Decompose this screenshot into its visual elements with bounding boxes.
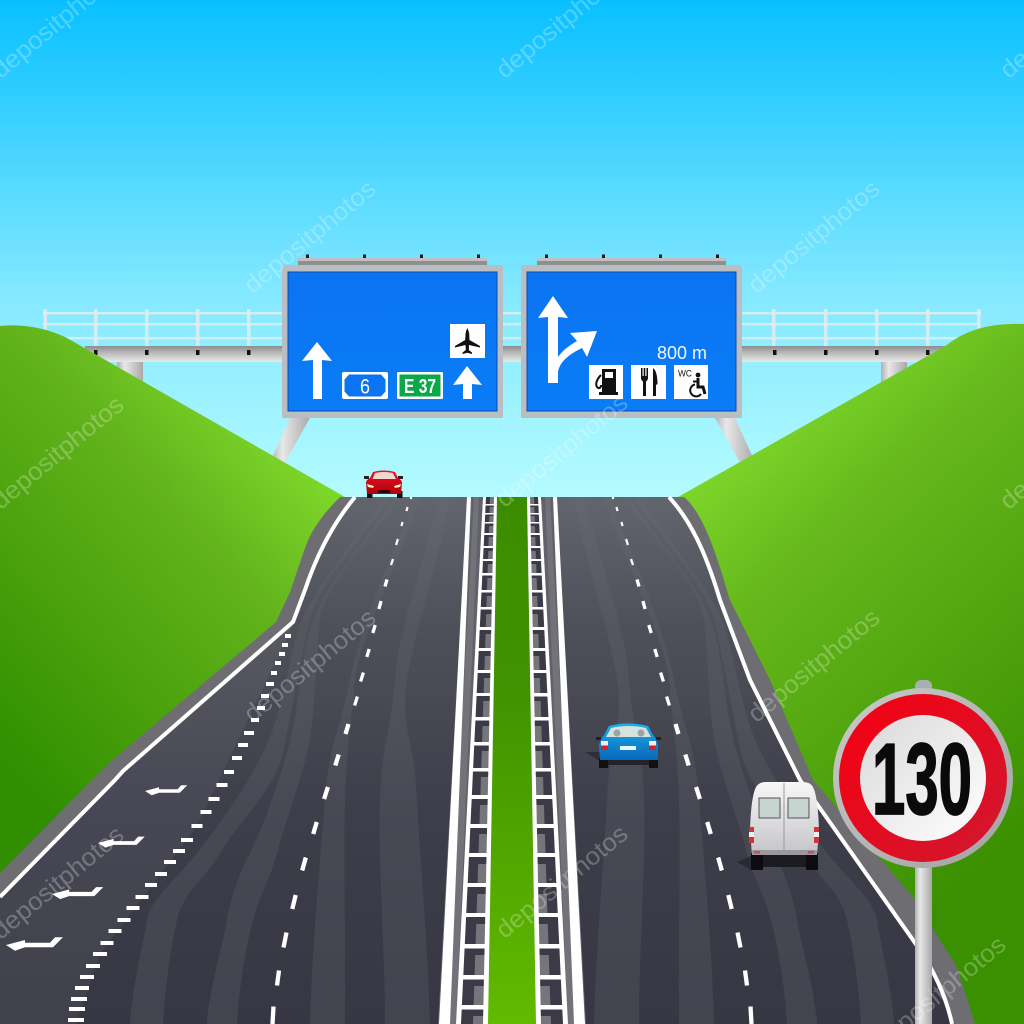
airport arrow xyxy=(453,366,482,399)
white van xyxy=(737,782,819,870)
sign post xyxy=(915,680,932,1024)
gantry railing right xyxy=(742,309,981,346)
right gravel shoulder xyxy=(650,497,975,1024)
right edge line xyxy=(669,497,952,1024)
left carriageway stripes xyxy=(130,688,430,1024)
red ring xyxy=(839,694,1007,862)
E37 sign: E 37 xyxy=(404,376,436,398)
green median strip xyxy=(486,497,538,1024)
stock watermark text: depositphotos xyxy=(491,820,633,944)
asphalt surface xyxy=(0,497,952,1024)
restaurant service icon xyxy=(631,365,666,399)
exit lane arrows xyxy=(6,785,187,951)
gantry railing left xyxy=(43,309,283,346)
stock watermark text: depositphotos xyxy=(743,175,885,299)
stock watermark text: depositphotos xyxy=(743,604,885,728)
left edge line xyxy=(0,497,355,897)
WC accessible service icon xyxy=(674,365,708,399)
right carriageway lane dashes xyxy=(613,497,752,1024)
left guard rail ladder xyxy=(456,497,497,1024)
gantry column right xyxy=(881,362,907,384)
branching arrow xyxy=(538,296,597,383)
gray rim xyxy=(833,688,1013,868)
stock watermark text: depositphotos xyxy=(239,175,381,299)
arrow 1 xyxy=(145,785,187,795)
gantry column left xyxy=(117,362,143,384)
beam bolts xyxy=(94,350,930,355)
sign blue face xyxy=(527,272,736,411)
right carriageway stripes xyxy=(594,688,894,1024)
central reservation xyxy=(438,497,586,1024)
stock watermark text: depositphotos xyxy=(491,389,633,513)
sign leg left xyxy=(270,416,311,466)
arrow 2 xyxy=(98,837,145,848)
sign leg right xyxy=(714,416,755,466)
stock watermark text: depositphotos xyxy=(239,604,381,728)
fuel service icon xyxy=(589,365,623,399)
top plate and bolts xyxy=(298,254,487,267)
route 6 shield xyxy=(342,372,388,399)
right motorway sign xyxy=(521,254,742,418)
white disc xyxy=(860,715,986,841)
inner edge line right xyxy=(553,497,585,1024)
median inner stripe left xyxy=(446,497,479,1024)
top plate and bolts xyxy=(537,254,726,267)
road xyxy=(0,497,975,1024)
median shoulder right xyxy=(540,497,586,1024)
sign frame xyxy=(282,265,503,418)
lighter exit lane surface xyxy=(0,625,293,1024)
gantry railing middle xyxy=(503,312,521,340)
left carriageway lane dashes xyxy=(272,497,411,1024)
E37 sign xyxy=(397,372,443,399)
straight arrow xyxy=(302,342,332,399)
route 6 shield: 6 xyxy=(360,376,370,398)
sign frame xyxy=(521,265,742,418)
exit lane block markings xyxy=(68,636,291,1020)
right guard rail ladder xyxy=(527,497,568,1024)
WC accessible service icon: WC xyxy=(678,368,692,380)
speed limit sign xyxy=(833,680,1013,1024)
airport plane box xyxy=(450,324,485,358)
median shoulder left xyxy=(438,497,484,1024)
inner edge line left xyxy=(439,497,471,1024)
arrow 4 xyxy=(6,937,63,951)
sign blue face xyxy=(288,272,497,411)
right green hill xyxy=(660,324,1024,1024)
median inner stripe right xyxy=(545,497,578,1024)
overhead gantry bridge xyxy=(43,309,981,466)
lighter tyre stripes xyxy=(130,497,894,1024)
red car xyxy=(364,470,403,498)
blue car xyxy=(585,724,661,768)
left green hill xyxy=(0,325,360,1024)
gantry beam xyxy=(85,346,945,362)
left gravel shoulder xyxy=(0,497,380,1000)
left motorway sign xyxy=(282,254,503,418)
arrow 3 xyxy=(52,887,103,899)
distance label: 800 m xyxy=(657,343,707,363)
sky background xyxy=(0,0,1024,497)
